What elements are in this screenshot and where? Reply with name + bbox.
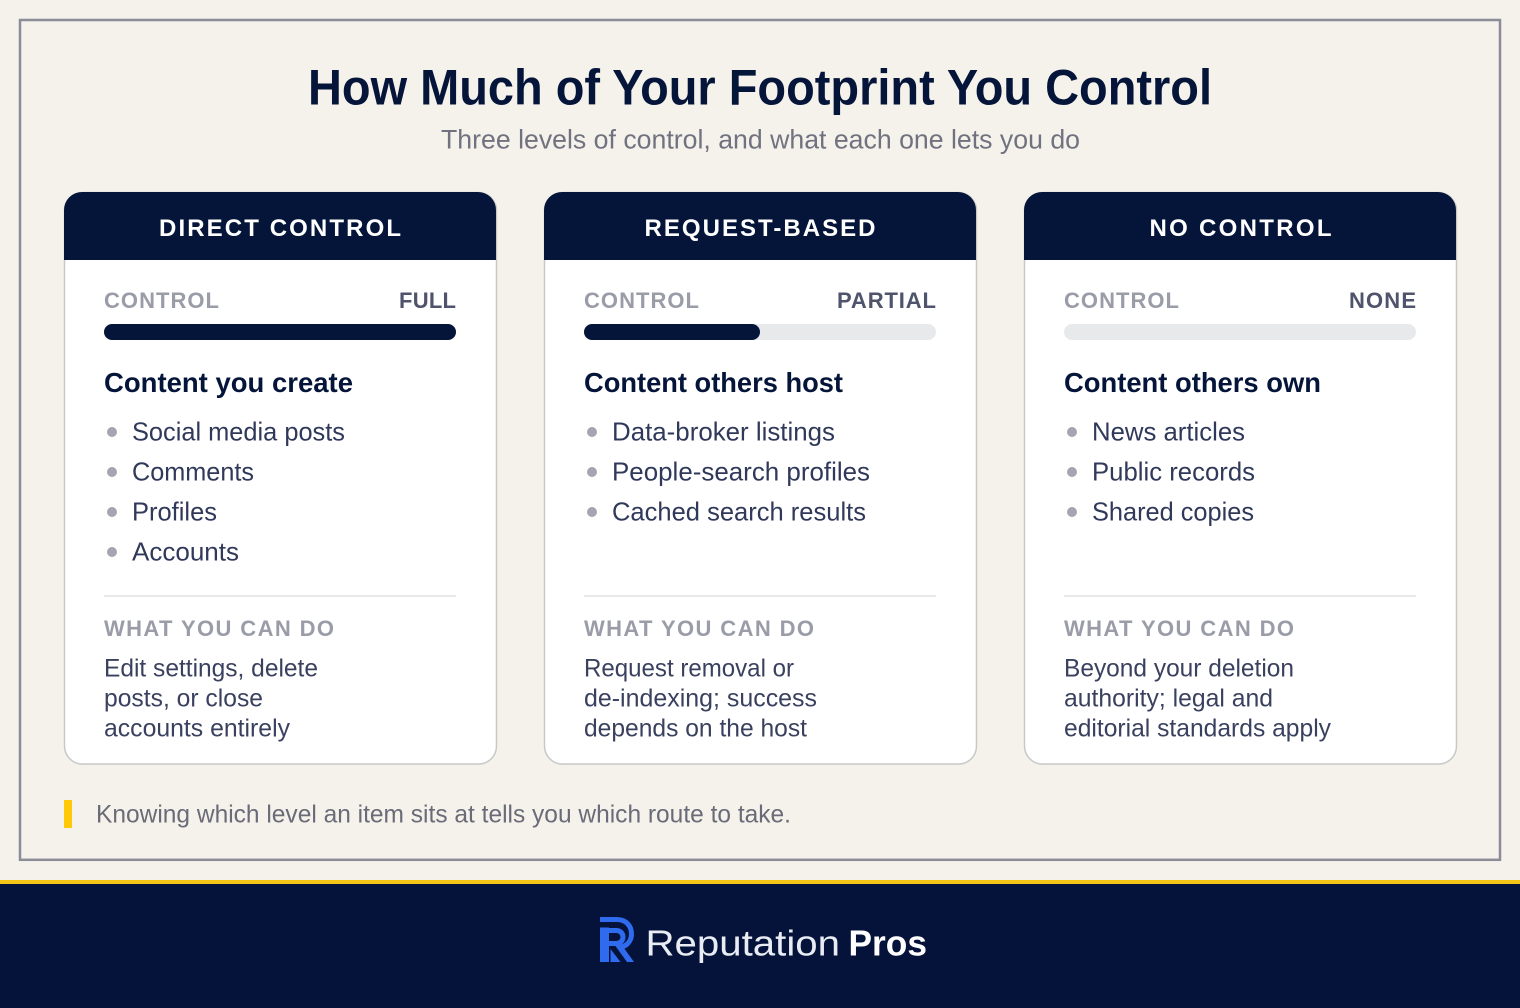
control meter: partial: [584, 324, 936, 340]
wordmark: [646, 922, 927, 964]
panel header: request-based: REQUEST-BASED: [644, 215, 876, 242]
what you can do text: [584, 654, 817, 742]
panel header: direct control: [64, 192, 496, 260]
callout note: Knowing which level an item sits at tells you which route to take.: [96, 800, 791, 828]
bullet list: Data-broker listings: [612, 416, 835, 446]
control value: NONE: [1349, 288, 1416, 313]
what you can do text: authority; legal and: [1064, 684, 1273, 712]
bullet list: Cached search results: [612, 496, 866, 526]
wordmark: Pros: [848, 922, 927, 964]
heading: Content others host: [584, 367, 843, 398]
what you can do text: depends on the host: [584, 714, 807, 742]
panel header: request-based: [544, 192, 976, 260]
logo: [600, 920, 927, 964]
bullet list: Accounts: [132, 536, 239, 566]
what you can do text: Edit settings, delete: [104, 654, 318, 682]
panel header: direct control: DIRECT CONTROL: [159, 215, 401, 242]
title: How Much of Your Footprint You Control: [308, 60, 1212, 116]
bullet list: [1067, 416, 1255, 526]
what you can do label: WHAT YOU CAN DO: [104, 616, 334, 641]
what you can do text: [1064, 654, 1331, 742]
panel: no control: [1024, 192, 1456, 764]
bullet list: Comments: [132, 456, 254, 486]
what you can do label: WHAT YOU CAN DO: [1064, 616, 1294, 641]
what you can do text: accounts entirely: [104, 714, 290, 742]
panel header: no control: [1024, 192, 1456, 260]
what you can do text: posts, or close: [104, 684, 263, 712]
control value: PARTIAL: [837, 288, 936, 313]
control label: CONTROL: [584, 288, 699, 313]
heading: Content you create: [104, 367, 353, 398]
heading: Content others own: [1064, 367, 1321, 398]
bullet list: Shared copies: [1092, 496, 1254, 526]
control value: FULL: [399, 288, 456, 313]
control meter: none: [1064, 324, 1416, 340]
bullet list: [587, 416, 870, 526]
footer band: [0, 880, 1520, 1008]
bullet list: Public records: [1092, 456, 1255, 486]
panel: request-based: [544, 192, 976, 764]
control label: CONTROL: [104, 288, 219, 313]
bullet list: News articles: [1092, 416, 1245, 446]
what you can do text: de-indexing; success: [584, 684, 817, 712]
what you can do text: editorial standards apply: [1064, 714, 1331, 742]
wordmark: Reputation: [646, 922, 840, 964]
what you can do text: [104, 654, 318, 742]
bullet list: Social media posts: [132, 416, 345, 446]
control meter: full: [104, 324, 456, 340]
panel: direct control: [64, 192, 496, 764]
control label: CONTROL: [1064, 288, 1179, 313]
panel header: no control: NO CONTROL: [1150, 215, 1332, 242]
bullet list: [107, 416, 345, 566]
bullet list: People-search profiles: [612, 456, 870, 486]
what you can do label: WHAT YOU CAN DO: [584, 616, 814, 641]
what you can do text: Beyond your deletion: [1064, 654, 1294, 682]
bullet list: Profiles: [132, 496, 217, 526]
subtitle: Three levels of control, and what each one lets you do: [441, 124, 1080, 154]
icon: R mark: [600, 920, 634, 962]
what you can do text: Request removal or: [584, 654, 794, 682]
